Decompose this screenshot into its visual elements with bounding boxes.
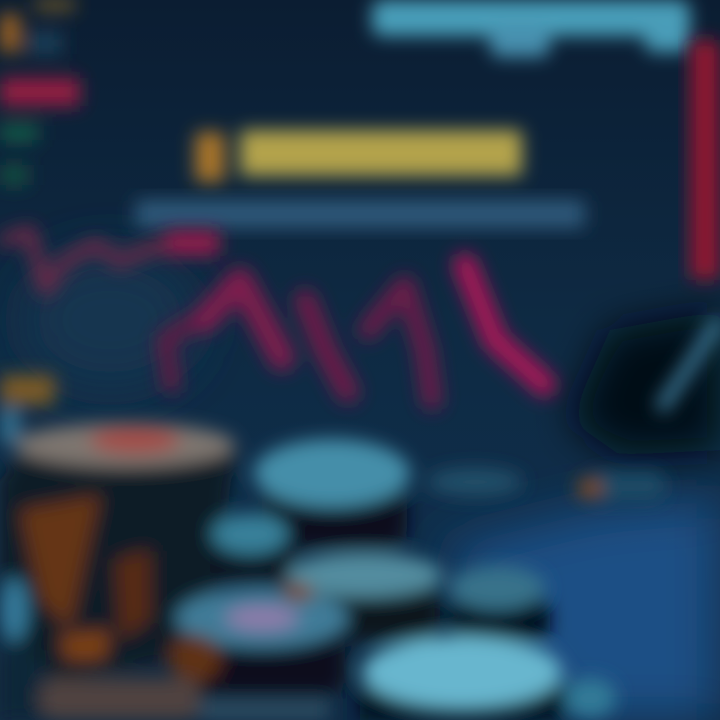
coin lilac — [180, 630, 345, 695]
magenta line chart — [165, 265, 545, 400]
coin right small — [427, 468, 523, 496]
coin bottom large — [360, 685, 565, 720]
orange reflections — [20, 495, 100, 630]
coin stacks — [0, 375, 665, 720]
coin bottom muted — [40, 678, 200, 720]
coin centre right — [450, 598, 550, 640]
title, yellow — [195, 130, 522, 182]
coin centre — [290, 585, 440, 640]
coin bottom left edge — [0, 578, 28, 642]
top teal banner — [372, 0, 690, 57]
blue floor, lower right — [20, 250, 720, 720]
subtitle — [135, 200, 585, 228]
left side coloured labels — [0, 0, 80, 185]
small red line chart, left — [5, 230, 220, 290]
right red bar — [690, 40, 720, 280]
coin small — [210, 538, 295, 584]
right dark object with blue stripe — [570, 310, 720, 455]
coin top centre — [262, 480, 407, 548]
dark cup, brown — [0, 450, 235, 680]
coin: small orange left — [0, 375, 55, 405]
